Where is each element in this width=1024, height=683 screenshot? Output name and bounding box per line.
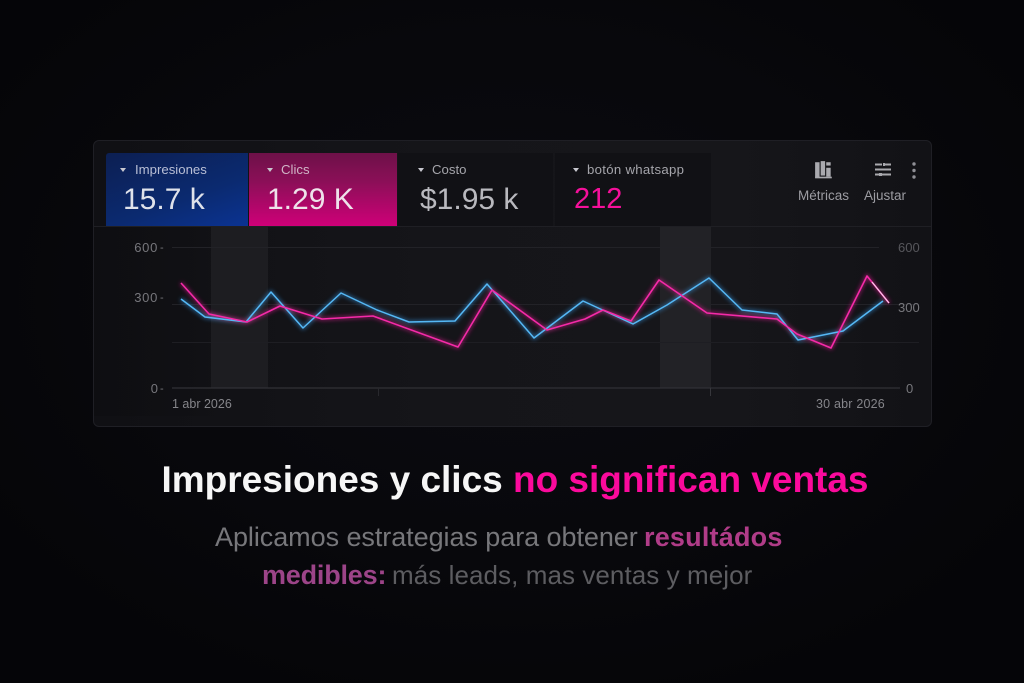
metric tile: impresiones: 15.7 k <box>123 183 205 216</box>
metric tile: clics <box>249 153 397 226</box>
metric tile: impresiones <box>106 153 248 226</box>
subheading: medibles: <box>262 560 386 590</box>
axis labels: - <box>160 292 164 304</box>
axis labels: - <box>160 383 164 395</box>
metric tile: impresiones: Impresiones <box>135 162 207 177</box>
dashboard panel <box>93 140 932 427</box>
axis labels: 30 abr 2026 <box>816 397 885 411</box>
metric tile: clics: 1.29 K <box>267 183 354 216</box>
axis labels: 600 <box>898 240 920 255</box>
icon: more menu <box>912 162 916 179</box>
series: clics <box>181 276 889 348</box>
label: ajustar: Ajustar <box>864 188 906 203</box>
metric tile: boton whatsapp <box>555 153 711 226</box>
subheading <box>215 522 783 590</box>
subheading: Aplicamos estrategias para obtener <box>215 522 638 552</box>
axis labels: 0 <box>906 381 913 396</box>
axis labels: - <box>160 242 164 254</box>
metric tile: costo: $1.95 k <box>420 183 518 216</box>
subheading: más leads, mas ventas y mejor <box>392 560 752 590</box>
axis labels: 600 <box>134 240 158 255</box>
axis labels: 300 <box>134 290 158 305</box>
metric tile: clics: Clics <box>281 162 310 177</box>
subheading: resultádos <box>644 522 783 552</box>
axis labels: 1 abr 2026 <box>172 397 232 411</box>
icon: metricas <box>815 161 832 178</box>
series highlight <box>872 282 889 303</box>
axis labels <box>134 240 920 411</box>
metric tile: costo: Costo <box>432 162 466 177</box>
metric tile: boton whatsapp: 212 <box>574 183 622 215</box>
heading: Impresiones y clics no significan ventas <box>162 459 868 500</box>
metric tile: boton whatsapp: botón whatsapp <box>587 162 684 177</box>
line chart <box>94 226 931 411</box>
label: metricas: Métricas <box>798 188 849 203</box>
series: impresiones <box>181 278 883 340</box>
axis labels: 300 <box>898 300 920 315</box>
metric tile: costo <box>398 153 553 226</box>
axis labels: 0 <box>151 381 158 396</box>
series glow <box>181 276 889 348</box>
icon: ajustar <box>875 163 891 176</box>
